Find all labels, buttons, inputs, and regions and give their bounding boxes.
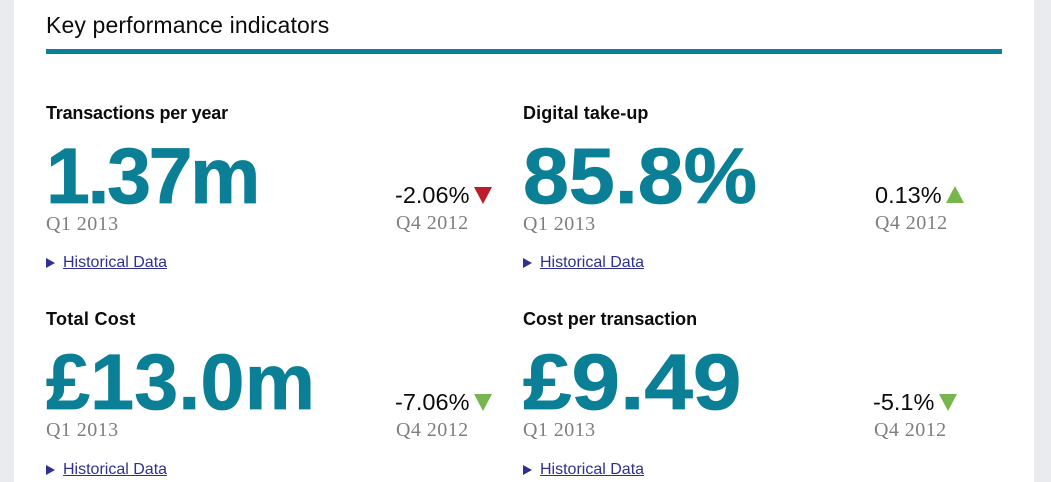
comparison period: Q4 2012 [396,419,469,441]
historical data link: Historical Data [63,254,167,271]
panel: digital take-up [523,103,964,271]
panel: cost per transaction [523,309,957,478]
title: Key performance indicators [46,12,329,38]
panel: total cost [46,309,492,478]
change value: -2.06% [395,182,469,208]
heading: Digital take-up [523,103,649,123]
main value: £9.49 [523,337,741,426]
icon: expand arrow [46,258,55,268]
comparison period: Q4 2012 [874,419,947,441]
icon: green up triangle [946,186,964,203]
icon: green down triangle [474,394,492,411]
main value: £13.0m [46,337,315,426]
period: Q1 2013 [523,419,596,441]
change value: -5.1% [873,389,934,415]
heading: Total Cost [46,309,136,329]
icon: green down triangle [939,394,957,411]
page margin left [0,0,14,482]
title rule [46,49,1002,54]
main value: 85.8% [523,131,757,220]
comparison period: Q4 2012 [875,212,948,234]
change value: -7.06% [395,389,469,415]
icon: expand arrow [523,258,532,268]
icon: expand arrow [523,465,532,475]
period: Q1 2013 [46,213,119,235]
historical data link: Historical Data [540,254,644,271]
page margin right [1034,0,1051,482]
change value: 0.13% [875,182,942,208]
icon: expand arrow [46,465,55,475]
heading: Transactions per year [46,103,228,123]
period: Q1 2013 [523,213,596,235]
historical data link: Historical Data [63,461,167,478]
main value: 1.37m [46,131,258,220]
comparison period: Q4 2012 [396,212,469,234]
historical data link: Historical Data [540,461,644,478]
period: Q1 2013 [46,419,119,441]
icon: red down triangle [474,187,492,204]
panel: transactions per year [46,103,492,271]
heading: Cost per transaction [523,309,697,329]
